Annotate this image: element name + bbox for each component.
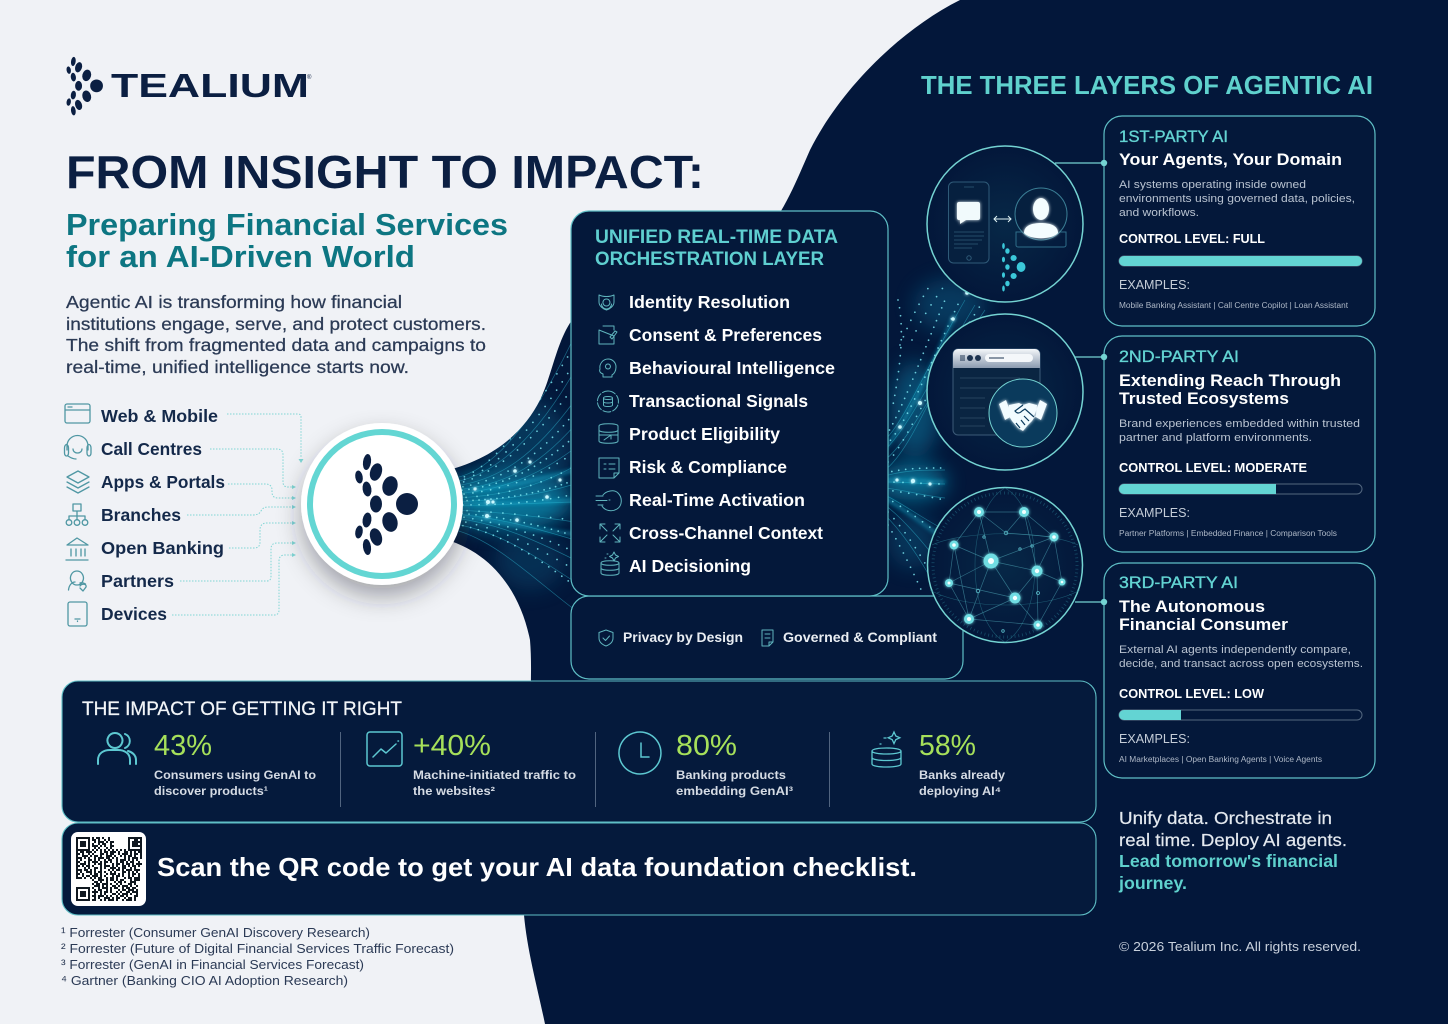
stat: 43 percent [154,730,316,798]
network node highlights [948,510,1063,627]
label: cross-channel: Cross-Channel Context [629,523,823,543]
stat: 58 percent: Banks already [919,768,1005,782]
panel heading: UNIFIED REAL-TIME DATA [595,227,838,248]
examples list: AI Marketplaces | Open Banking Agents | Voice Agents [1119,755,1322,764]
circle: second-party ecosystem illustration [927,314,1083,470]
connector: circle three to card [1075,599,1107,605]
intro text [66,292,486,377]
card heading: Your Agents, Your Domain [1119,150,1342,169]
control level bar [1119,484,1362,494]
stat: plus 40 percent [413,730,576,798]
intro text: real-time, unified intelligence starts now. [66,357,409,377]
card description [1119,179,1355,219]
intro text: Agentic AI is transforming how financial [66,292,402,312]
icon: small Tealium mark [1002,243,1025,292]
icon: open banking building [66,538,88,560]
stat: plus 40 percent: +40% [413,730,491,762]
card heading: Trusted Ecosystems [1119,389,1289,408]
card label: 3RD-PARTY AI [1119,573,1238,592]
QR code [71,832,146,906]
icon: people [98,733,136,764]
panel: unified orchestration layer [571,211,888,596]
panel: privacy and governance [571,596,963,679]
icon: Tealium dots logo [66,57,103,116]
network globe lines [930,488,1080,642]
icon: Tealium mark [354,454,418,555]
label: Devices: Devices [101,604,167,624]
card description: decide, and transact across open ecosystems. [1119,658,1363,670]
connector: circle one to card [1055,160,1107,166]
label: Governed & Compliant: Governed & Compliant [783,630,938,645]
icon: customer avatar [1015,188,1067,247]
label: behaviour: Behavioural Intelligence [629,358,835,378]
card heading: The Autonomous [1119,597,1265,616]
card heading: Extending Reach Through [1119,371,1341,390]
label: Call Centres: Call Centres [101,439,202,459]
stat: 58 percent: 58% [919,730,976,762]
hub white disc [301,423,463,585]
CTA text: Scan the QR code to get your AI data foundation checklist. [157,852,917,882]
bright particles [895,291,969,486]
examples label: EXAMPLES: [1119,505,1190,520]
stat: 80 percent [676,730,793,798]
closing statement [1118,808,1347,893]
card: first-party AI [1104,116,1375,326]
card description [1119,418,1360,444]
bright particles [473,460,562,522]
stat: 43 percent: discover products¹ [154,784,268,798]
footnotes: ³ Forrester (GenAI in Financial Services Forecast) [61,957,364,972]
icon: consent document [599,326,617,344]
stat: 43 percent: 43% [154,730,212,762]
panel heading: ORCHESTRATION LAYER [595,249,824,270]
panel: QR call to action [62,823,1096,915]
icon: branch hierarchy [69,504,85,520]
icon: clock [619,732,661,774]
data stream: left funnel into orchestration panel [455,344,572,608]
connector: circle two to card [1075,354,1107,360]
right column heading: THE THREE LAYERS OF AGENTIC AI [921,70,1373,100]
network dotted edge [933,493,1077,637]
footnotes: ² Forrester (Future of Digital Financial Services Traffic Forecast) [61,941,454,956]
subtitle: for an AI-Driven World [66,239,415,274]
label: Open Banking: Open Banking [101,538,224,558]
stat: 80 percent: 80% [676,730,737,762]
panel: data source channels [64,404,225,626]
icon: product eligibility [599,424,618,443]
title: FROM INSIGHT TO IMPACT: [66,146,704,198]
card description: and workflows. [1119,207,1199,219]
hub teal ring [310,432,454,576]
icon: partners person [68,571,86,591]
card: third-party AI [1104,563,1375,778]
icon: privacy shield [599,630,613,646]
dashed connectors from channels to hub [172,414,304,615]
label: Branches: Branches [101,505,181,525]
closing statement: real time. Deploy AI agents. [1119,830,1347,850]
icon: device tablet [68,602,87,626]
label: AI decisioning: AI Decisioning [629,556,751,576]
control level label: CONTROL LEVEL: FULL [1119,232,1265,246]
circle: first-party agents illustration [927,146,1083,302]
icon: growth chart [367,732,402,766]
closing statement: Lead tomorrow's financial [1119,851,1338,871]
card label: 2ND-PARTY AI [1119,347,1239,366]
label: Privacy by Design: Privacy by Design [623,630,743,645]
impact heading: THE IMPACT OF GETTING IT RIGHT [82,699,402,720]
label: activation: Real-Time Activation [629,490,805,510]
footnotes: ¹ Forrester (Consumer GenAI Discovery Research) [61,925,370,940]
icon: risk checklist [599,458,619,478]
label: Partners: Partners [101,571,174,591]
icon: cross-channel arrows [600,524,620,542]
label: identity: Identity Resolution [629,292,790,312]
icon: two-way arrow [994,216,1011,222]
icon: identity shield [599,295,614,310]
card description: Brand experiences embedded within trusted [1119,418,1360,430]
control level bar [1119,710,1362,720]
card description [1119,644,1363,670]
copyright: © 2026 Tealium Inc. All rights reserved. [1119,939,1361,954]
stat: plus 40 percent: Machine-initiated traffic to [413,768,576,782]
examples label: EXAMPLES: [1119,731,1190,746]
card heading: Financial Consumer [1119,615,1288,634]
icon: phone [948,182,989,263]
icon: real-time activation [596,491,621,511]
network small nodes [976,531,1040,632]
logo wordmark: TEALIUM [111,68,309,105]
network edges [949,512,1062,625]
examples list: Mobile Banking Assistant | Call Centre Copilot | Loan Assistant [1119,301,1349,310]
stat: 80 percent: embedding GenAI³ [676,784,793,798]
card description: External AI agents independently compare, [1119,644,1351,656]
stat: plus 40 percent: the websites² [413,784,495,798]
icon: call centre headset [64,436,91,459]
stat: 58 percent [919,730,1005,798]
data stream: right fan toward layer circles [878,279,986,610]
intro text: institutions engage, serve, and protect customers. [66,314,486,334]
icon: AI decisioning database [601,552,619,575]
footnotes [61,925,454,988]
closing statement: Unify data. Orchestrate in [1119,808,1332,828]
examples label: EXAMPLES: [1119,277,1190,292]
label: risk: Risk & Compliance [629,457,787,477]
card description: AI systems operating inside owned [1119,179,1306,191]
subtitle: Preparing Financial Services [66,207,508,242]
icon: transaction database cylinder [604,396,612,406]
icon: web browser [65,404,90,423]
card description: environments using governed data, policies, [1119,193,1355,205]
icon: behavioural head [600,359,616,377]
card heading [1119,371,1341,408]
closing statement: journey. [1118,873,1187,893]
panel heading [595,227,838,270]
control level bar [1119,256,1362,266]
panel: impact statistics [62,681,1096,822]
label: Web & Mobile: Web & Mobile [101,406,218,426]
label: product: Product Eligibility [629,424,780,444]
card heading [1119,597,1288,634]
central hub circle with logo [301,423,463,585]
card description: partner and platform environments. [1119,432,1312,444]
network nodes [945,507,1066,630]
label: Apps & Portals: Apps & Portals [101,472,225,492]
circle: third-party network illustration [928,488,1082,642]
intro text: The shift from fragmented data and campaigns to [66,335,486,355]
stat: 43 percent: Consumers using GenAI to [154,768,316,782]
stat: 58 percent: deploying AI⁴ [919,784,1001,798]
stat: 80 percent: Banking products [676,768,786,782]
icon: governance document [762,630,773,646]
dark curved background shape [440,0,1448,1024]
examples list: Partner Platforms | Embedded Finance | Comparison Tools [1119,529,1337,538]
subtitle [66,207,508,274]
icon: browser window [953,349,1040,435]
control level label: CONTROL LEVEL: MODERATE [1119,461,1307,475]
icon: chat bubble [957,202,980,224]
control level label: CONTROL LEVEL: LOW [1119,687,1264,701]
footnotes: ⁴ Gartner (Banking CIO AI Adoption Research) [61,973,348,988]
logo [66,57,312,116]
icon: branch hierarchy nodes [66,520,88,525]
label: consent: Consent & Preferences [629,325,822,345]
card label: 1ST-PARTY AI [1119,127,1228,146]
icon: layered apps [67,471,89,493]
icon: transaction database [597,391,618,412]
card: second-party AI [1104,336,1375,552]
icon: database with sparkle [872,732,901,767]
icon: handshake [989,379,1057,447]
label: transactional: Transactional Signals [629,391,808,411]
registered mark: ® [307,74,312,81]
